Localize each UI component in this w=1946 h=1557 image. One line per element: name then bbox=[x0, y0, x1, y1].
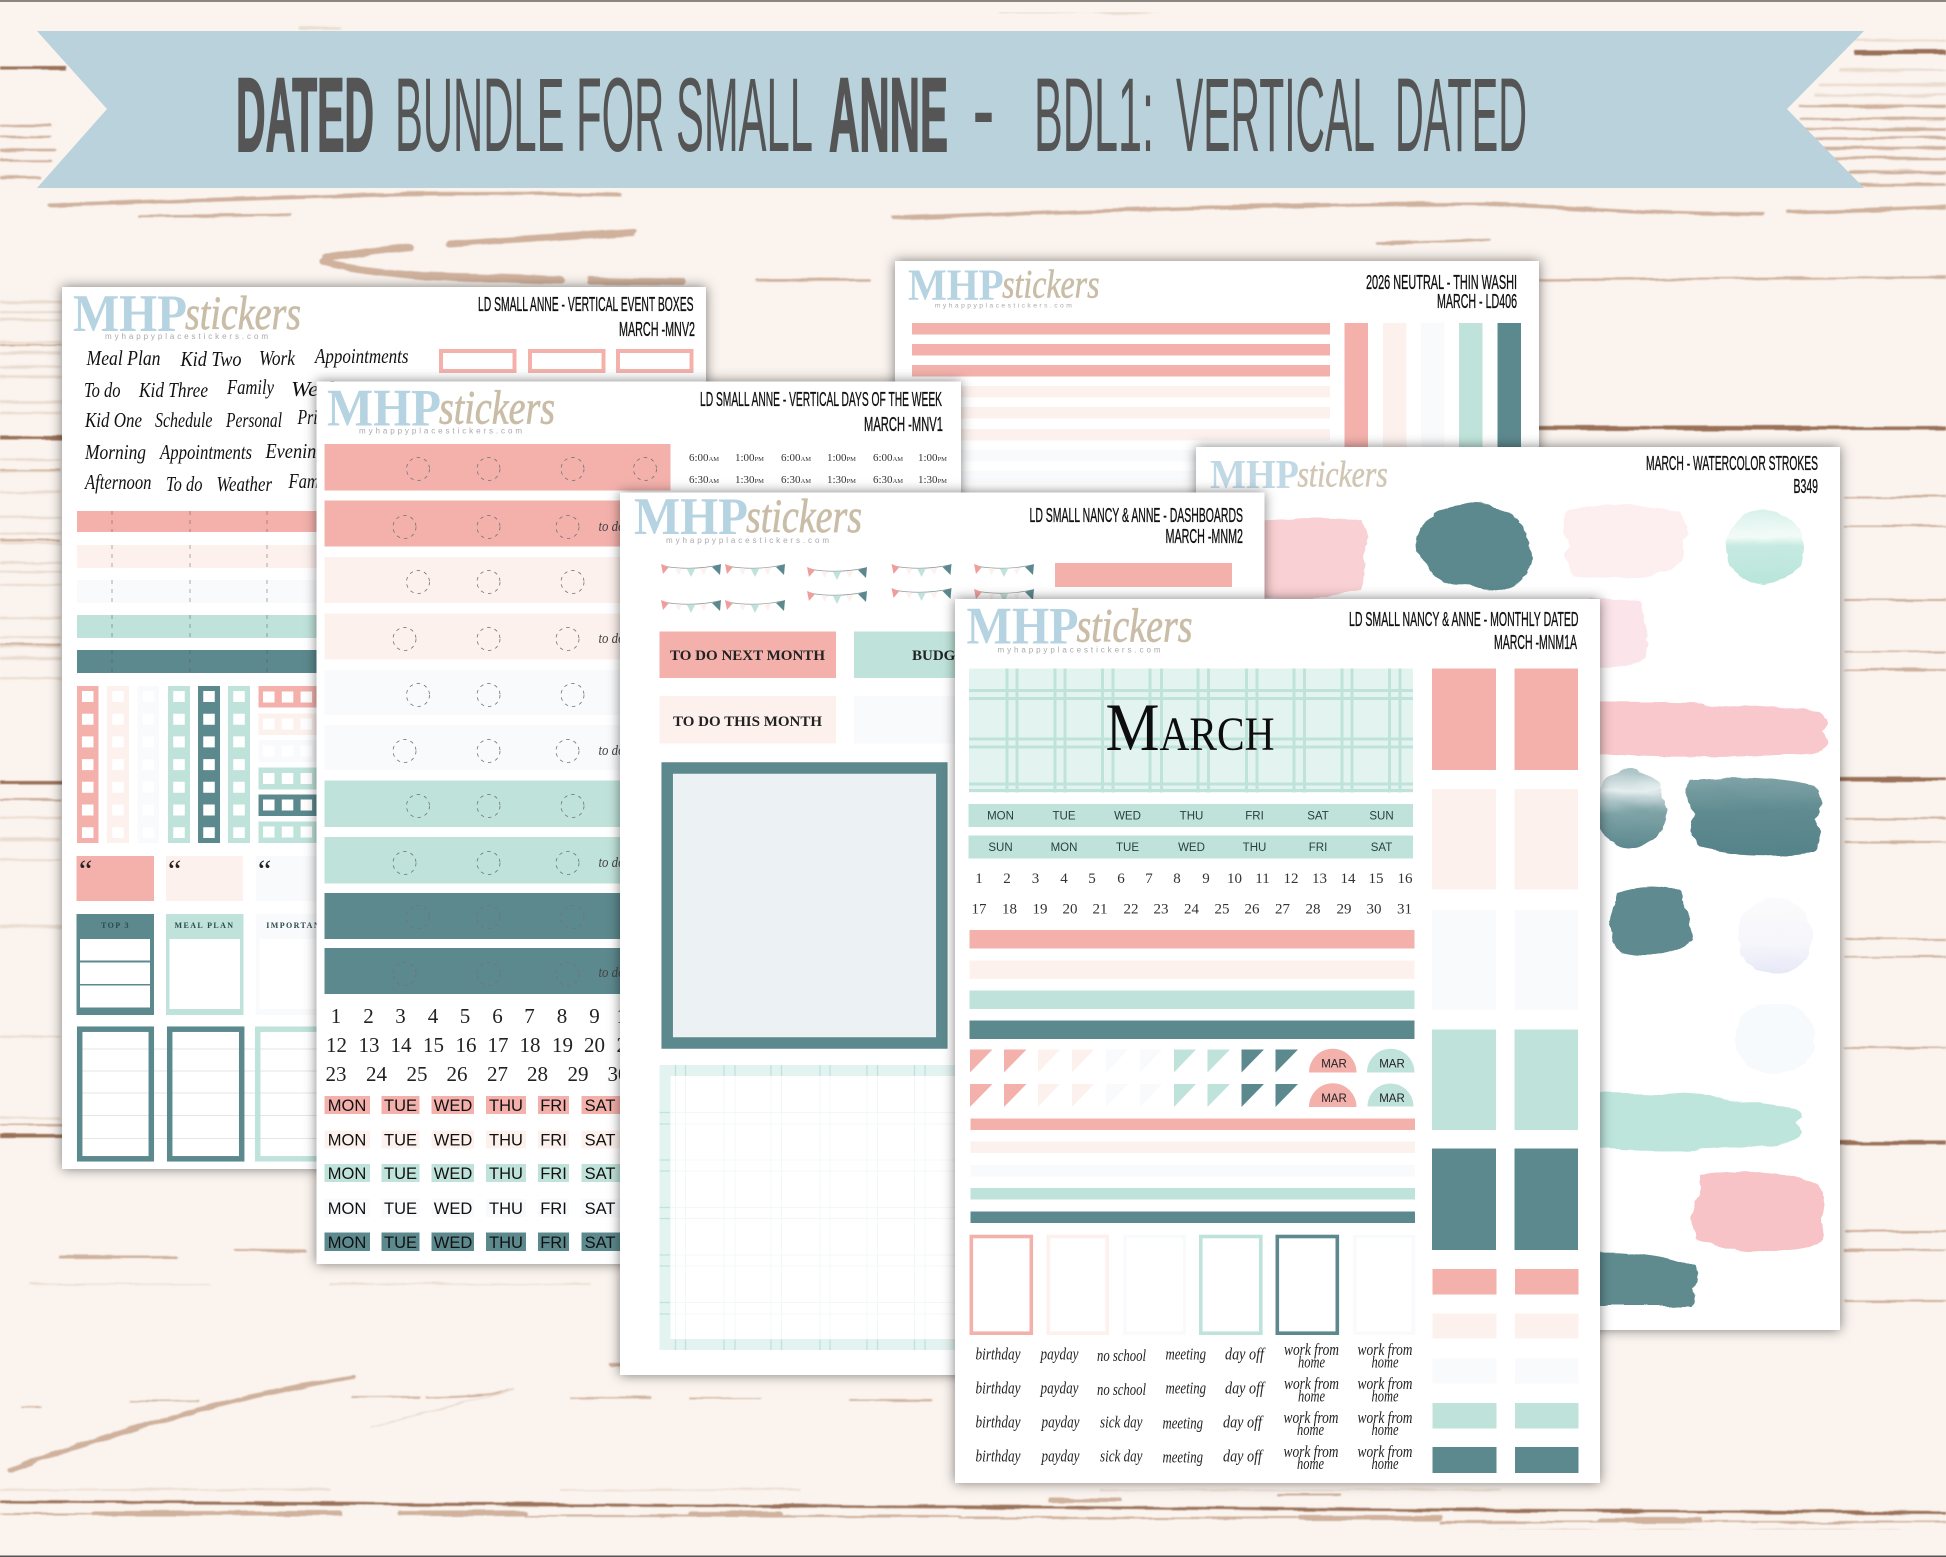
horizontal checklist tabs bbox=[258, 686, 334, 843]
logo: stickers bbox=[439, 382, 555, 434]
logo: stickers bbox=[746, 490, 862, 543]
lined note boxes bbox=[80, 1029, 330, 1159]
weekday stickers: THU bbox=[489, 1132, 523, 1150]
to do this month label bbox=[660, 696, 836, 744]
time stickers: 6:00AM bbox=[873, 452, 903, 464]
to do labels: to do bbox=[598, 965, 625, 981]
sheet heading bbox=[700, 389, 943, 436]
logo bbox=[908, 259, 1100, 310]
date number stickers: 18 bbox=[520, 1033, 540, 1057]
date numbers: 9 bbox=[1202, 871, 1210, 887]
logo: myhappyplacestickers.com bbox=[666, 536, 829, 545]
weekday stickers: SAT bbox=[585, 1234, 615, 1252]
date numbers: 29 bbox=[1336, 902, 1352, 918]
vertical checklist tabs bbox=[77, 686, 250, 843]
date number stickers: 19 bbox=[552, 1033, 573, 1057]
weekday bands: MON bbox=[987, 810, 1014, 822]
plaid month header: M bbox=[1106, 689, 1160, 765]
script word labels: To do bbox=[84, 378, 120, 402]
sheet heading: 2026 NEUTRAL - THIN WASHI bbox=[1366, 272, 1517, 294]
script event words: work from bbox=[1358, 1374, 1412, 1393]
weekday bands: MON bbox=[1051, 842, 1077, 854]
to do labels: to do bbox=[598, 743, 625, 759]
weekday stickers: SAT bbox=[585, 1132, 615, 1150]
weekday bands: FRI bbox=[1309, 842, 1327, 854]
logo: myhappyplacestickers.com bbox=[935, 303, 1072, 310]
weekday bands: FRI bbox=[1245, 810, 1264, 822]
sheet heading bbox=[1646, 453, 1818, 498]
date number stickers: 3 bbox=[395, 1004, 406, 1028]
logo: MHP bbox=[73, 285, 187, 343]
date numbers: 17 bbox=[972, 902, 987, 918]
pink outline boxes bbox=[441, 351, 692, 371]
script event words: home bbox=[1297, 1420, 1324, 1439]
date numbers: 5 bbox=[1088, 871, 1096, 887]
date number stickers: 23 bbox=[326, 1062, 346, 1086]
title banner: BDL1: bbox=[1034, 57, 1154, 174]
bunting stickers bbox=[661, 564, 1034, 613]
weekday stickers: TUE bbox=[384, 1200, 417, 1218]
time stickers: 6:30AM bbox=[689, 474, 719, 486]
script event words: birthday bbox=[976, 1378, 1021, 1398]
wide colour strips with dashed cuts bbox=[77, 511, 332, 673]
date number stickers: 1 bbox=[331, 1004, 341, 1028]
title banner: ANNE bbox=[829, 57, 948, 174]
time stickers: 6:00AM bbox=[781, 452, 811, 464]
logo bbox=[1210, 451, 1388, 497]
date number stickers: 25 bbox=[406, 1062, 428, 1086]
dashed circles bbox=[393, 458, 656, 986]
date number stickers: 9 bbox=[589, 1004, 600, 1028]
quote boxes: “ bbox=[168, 854, 181, 887]
script event words: work from bbox=[1284, 1374, 1339, 1393]
date numbers: 18 bbox=[1002, 902, 1017, 918]
script word labels: Schedule bbox=[155, 408, 212, 432]
script word labels: Priority bbox=[297, 405, 348, 429]
script event words: birthday bbox=[976, 1412, 1021, 1432]
script event words: home bbox=[1372, 1420, 1399, 1439]
pink label bar bbox=[1055, 563, 1232, 587]
date numbers: 10 bbox=[1227, 871, 1242, 887]
horizontal washi strips bbox=[912, 323, 1330, 482]
script event words: payday bbox=[1040, 1344, 1079, 1364]
time stickers: 1:00PM bbox=[918, 452, 947, 464]
title banner: DATED bbox=[1395, 57, 1527, 174]
date numbers: 12 bbox=[1284, 871, 1298, 887]
sheet heading: MARCH -MNM2 bbox=[1166, 526, 1243, 548]
date numbers: 1 bbox=[975, 871, 983, 887]
to do labels bbox=[598, 519, 625, 981]
script word labels: Appointments bbox=[158, 440, 252, 464]
script event words: meeting bbox=[1166, 1344, 1206, 1364]
weekday bands: SAT bbox=[1371, 842, 1392, 854]
weekday stickers: WED bbox=[434, 1200, 472, 1218]
sheet heading: MARCH -MNV1 bbox=[864, 414, 943, 436]
date numbers: 30 bbox=[1366, 902, 1382, 918]
triangle page flags bbox=[970, 1050, 1298, 1107]
quote boxes: “ bbox=[79, 854, 92, 887]
script event words: meeting bbox=[1166, 1378, 1206, 1398]
weekday stickers: MON bbox=[328, 1165, 366, 1183]
script event words: day off bbox=[1225, 1344, 1266, 1364]
headed note boxes: TOP 3 bbox=[101, 921, 130, 930]
date number stickers: 26 bbox=[446, 1062, 468, 1086]
script word labels: Evening bbox=[265, 439, 326, 463]
script event words: work from bbox=[1358, 1442, 1412, 1461]
script word labels: To do bbox=[166, 472, 202, 496]
headed note boxes bbox=[76, 914, 333, 1015]
logo: stickers bbox=[1297, 455, 1388, 496]
weekday stickers: THU bbox=[489, 1165, 523, 1183]
title banner bbox=[37, 31, 1864, 188]
weekday stickers: WED bbox=[434, 1165, 472, 1183]
date number stickers bbox=[326, 1004, 670, 1086]
sheet heading bbox=[1030, 505, 1243, 548]
weekday stickers: MON bbox=[328, 1097, 366, 1115]
script event words: work from bbox=[1284, 1442, 1338, 1461]
script word labels: Week bbox=[291, 377, 340, 401]
to do this month label: TO DO THIS MONTH bbox=[673, 714, 822, 730]
weekday stickers: THU bbox=[489, 1200, 523, 1218]
weekday stickers: FRI bbox=[540, 1234, 567, 1252]
panel: vertical days of the week sheet MNV1 bbox=[316, 380, 961, 1264]
weekday bands: TUE bbox=[1052, 810, 1076, 822]
headed note boxes: MEAL PLAN bbox=[175, 921, 234, 930]
date number stickers: 8 bbox=[557, 1004, 567, 1028]
logo bbox=[327, 380, 555, 438]
date numbers: 14 bbox=[1340, 871, 1356, 887]
date numbers: 26 bbox=[1244, 902, 1260, 918]
date number stickers: 24 bbox=[366, 1062, 388, 1086]
date numbers: 28 bbox=[1306, 902, 1320, 918]
weekday stickers: TUE bbox=[384, 1132, 417, 1150]
date numbers: 8 bbox=[1173, 871, 1181, 887]
script event words bbox=[976, 1340, 1412, 1473]
script event words: day off bbox=[1225, 1378, 1266, 1398]
script event words: birthday bbox=[976, 1446, 1021, 1466]
watercolor swatches bbox=[1262, 502, 1828, 1306]
script event words: work from bbox=[1358, 1408, 1412, 1427]
to do labels: to do bbox=[598, 855, 625, 871]
date number stickers: 29 bbox=[568, 1062, 588, 1086]
script event words: birthday bbox=[976, 1344, 1021, 1364]
date numbers: 15 bbox=[1368, 871, 1384, 887]
script event words: home bbox=[1298, 1352, 1325, 1372]
quote boxes bbox=[76, 854, 333, 901]
script word labels: Kid Three bbox=[138, 378, 208, 402]
blank pale label bbox=[854, 696, 1031, 744]
sheet heading: MARCH -MNM1A bbox=[1494, 632, 1577, 654]
logo: MHP bbox=[966, 598, 1078, 656]
script event words: home bbox=[1372, 1386, 1399, 1406]
time stickers: 1:30PM bbox=[918, 474, 947, 486]
date numbers: 16 bbox=[1398, 871, 1413, 887]
date number stickers: 7 bbox=[524, 1004, 535, 1028]
sheet heading bbox=[478, 294, 695, 341]
script event words: work from bbox=[1358, 1340, 1412, 1359]
sheet heading: MARCH - LD406 bbox=[1437, 291, 1517, 313]
sheet heading: B349 bbox=[1794, 476, 1818, 498]
sheet heading: LD SMALL NANCY & ANNE - MONTHLY DATED bbox=[1349, 609, 1578, 631]
wide stripes bbox=[970, 930, 1414, 1039]
sheet heading: LD SMALL ANNE - VERTICAL DAYS OF THE WEEK bbox=[700, 389, 942, 411]
panel: watercolor strokes sheet B349 bbox=[1196, 447, 1840, 1330]
script word labels: Kid One bbox=[84, 408, 142, 432]
weekday stickers: THU bbox=[489, 1234, 523, 1252]
grid panel with mint frame bbox=[660, 1065, 995, 1350]
sheet heading bbox=[1349, 609, 1578, 654]
script word labels: Weather bbox=[216, 472, 273, 496]
sheet heading bbox=[1366, 272, 1517, 313]
date numbers: 7 bbox=[1145, 871, 1153, 887]
title banner: DATED bbox=[236, 57, 374, 174]
logo: myhappyplacestickers.com bbox=[359, 426, 522, 436]
date number stickers: 12 bbox=[326, 1033, 347, 1057]
weekday bands: SUN bbox=[1369, 810, 1394, 822]
logo: stickers bbox=[185, 287, 301, 340]
logo: myhappyplacestickers.com bbox=[105, 332, 268, 341]
panel: vertical event boxes sheet MNV2 bbox=[62, 285, 706, 1169]
script event words: no school bbox=[1097, 1346, 1146, 1365]
date number stickers: 28 bbox=[527, 1062, 548, 1086]
script word labels: Personal bbox=[225, 408, 282, 432]
logo: myhappyplacestickers.com bbox=[998, 646, 1161, 654]
title banner: BUNDLE FOR SMALL bbox=[395, 57, 813, 174]
month half-circle tabs: MAR bbox=[1321, 1058, 1347, 1070]
date number stickers: 17 bbox=[488, 1033, 508, 1057]
panel: thin washi sheet LD406 bbox=[895, 259, 1539, 601]
date numbers: 11 bbox=[1255, 871, 1270, 887]
date number stickers: 20 bbox=[584, 1033, 605, 1057]
script word labels bbox=[83, 344, 409, 496]
script word labels: Appointments bbox=[313, 344, 408, 368]
right column colour blocks bbox=[1432, 668, 1578, 1473]
script word labels: Kid Two bbox=[180, 347, 242, 371]
weekday bands: TUE bbox=[1116, 842, 1139, 854]
date number stickers: 30 bbox=[608, 1062, 628, 1086]
month half-circle tabs: MAR bbox=[1321, 1093, 1347, 1105]
weekday stickers: TUE bbox=[384, 1097, 417, 1115]
date numbers: 6 bbox=[1117, 871, 1125, 887]
weekday stickers: WED bbox=[434, 1097, 472, 1115]
date number stickers: 11 bbox=[650, 1004, 670, 1028]
date numbers: 20 bbox=[1062, 902, 1078, 918]
date number stickers: 27 bbox=[487, 1062, 508, 1086]
logo bbox=[966, 598, 1192, 656]
script word labels: Morning bbox=[84, 440, 146, 464]
script event words: work from bbox=[1284, 1408, 1338, 1427]
weekday stickers bbox=[324, 1096, 620, 1252]
script event words: sick day bbox=[1100, 1412, 1143, 1432]
script word labels: Family bbox=[226, 375, 275, 399]
logo: stickers bbox=[1076, 600, 1192, 652]
budget label: BUDGET bbox=[912, 648, 975, 664]
to do labels: to do bbox=[598, 519, 625, 535]
script event words: day off bbox=[1223, 1412, 1264, 1432]
panel: dashboards sheet MNM2 bbox=[620, 488, 1264, 1375]
weekday bands: SUN bbox=[988, 842, 1013, 854]
weekday stickers: SAT bbox=[585, 1097, 615, 1115]
quote boxes: “ bbox=[258, 854, 271, 887]
weekday stickers: TUE bbox=[384, 1234, 417, 1252]
script event words: home bbox=[1372, 1352, 1399, 1372]
script event words: payday bbox=[1040, 1378, 1079, 1398]
date numbers: 2 bbox=[1003, 871, 1011, 887]
weekday stickers: MON bbox=[328, 1200, 366, 1218]
date numbers: 3 bbox=[1032, 871, 1039, 887]
date number stickers: 10 bbox=[616, 1004, 638, 1028]
outline boxes bbox=[971, 1236, 1413, 1333]
weekday bands: WED bbox=[1178, 842, 1205, 854]
script word labels: Meal Plan bbox=[86, 346, 160, 370]
date number stickers: 2 bbox=[363, 1004, 374, 1028]
title banner: - bbox=[974, 79, 993, 146]
weekday bands: WED bbox=[1114, 810, 1141, 822]
month half-circle tabs: MAR bbox=[1379, 1093, 1405, 1105]
title banner: VERTICAL bbox=[1176, 57, 1375, 174]
weekday bands: SAT bbox=[1307, 810, 1329, 822]
script event words: home bbox=[1297, 1454, 1324, 1473]
plaid month header bbox=[969, 668, 1413, 792]
panel: monthly dated sheet MNM1A bbox=[955, 598, 1600, 1483]
date number stickers: 5 bbox=[460, 1004, 470, 1028]
logo: MHP bbox=[908, 259, 1004, 309]
sheet heading: MARCH -MNV2 bbox=[619, 319, 695, 341]
weekday stickers: MON bbox=[328, 1132, 366, 1150]
script event words: day off bbox=[1223, 1446, 1264, 1466]
time stickers: 1:00PM bbox=[827, 452, 856, 464]
time stickers: 6:00AM bbox=[689, 452, 719, 464]
date numbers: 13 bbox=[1312, 871, 1327, 887]
weekday stickers: THU bbox=[489, 1097, 523, 1115]
weekday bands bbox=[968, 804, 1413, 858]
budget label bbox=[854, 632, 1031, 678]
script word labels: Family bbox=[288, 469, 336, 493]
logo bbox=[73, 285, 301, 343]
weekday stickers: FRI bbox=[540, 1132, 567, 1150]
to do labels: to do bbox=[598, 631, 625, 647]
date numbers: 23 bbox=[1154, 902, 1168, 918]
script event words: meeting bbox=[1162, 1448, 1203, 1466]
to do next month label bbox=[660, 632, 836, 678]
time stickers bbox=[689, 452, 947, 486]
thin stripes bbox=[970, 1118, 1415, 1223]
sheet heading: LD SMALL NANCY & ANNE - DASHBOARDS bbox=[1030, 505, 1243, 527]
weekday stickers: TUE bbox=[384, 1165, 417, 1183]
logo: MHP bbox=[327, 380, 441, 438]
plaid month header: ARCH bbox=[1160, 708, 1274, 761]
coloured day bars bbox=[324, 444, 670, 994]
script event words: home bbox=[1372, 1454, 1399, 1473]
date numbers: 21 bbox=[1092, 902, 1108, 918]
date number stickers: 6 bbox=[492, 1004, 503, 1028]
weekday stickers: FRI bbox=[540, 1165, 567, 1183]
time stickers: 1:30PM bbox=[735, 474, 764, 486]
headed note boxes: IMPORTANT bbox=[266, 921, 328, 930]
date numbers: 19 bbox=[1032, 902, 1048, 918]
date number stickers: 22 bbox=[650, 1033, 670, 1057]
date numbers: 22 bbox=[1124, 902, 1138, 918]
script word labels: Afternoon bbox=[83, 470, 152, 494]
logo bbox=[634, 488, 862, 546]
script word labels: Work bbox=[259, 346, 296, 370]
script event words: meeting bbox=[1162, 1414, 1203, 1432]
date number stickers: 4 bbox=[428, 1004, 439, 1028]
script event words: no school bbox=[1097, 1380, 1146, 1399]
weekday stickers: MON bbox=[328, 1234, 366, 1252]
logo: MHP bbox=[1210, 451, 1299, 497]
time stickers: 1:00PM bbox=[735, 452, 764, 464]
date number stickers: 16 bbox=[456, 1033, 476, 1057]
date number stickers: 13 bbox=[358, 1033, 380, 1057]
logo: stickers bbox=[1002, 262, 1100, 307]
to do next month label: TO DO NEXT MONTH bbox=[670, 648, 825, 664]
time stickers: 1:30PM bbox=[827, 474, 856, 486]
weekday stickers: WED bbox=[434, 1132, 472, 1150]
script event words: work from bbox=[1284, 1340, 1339, 1359]
date numbers: 24 bbox=[1184, 902, 1200, 918]
date number stickers: 15 bbox=[423, 1033, 444, 1057]
month half-circle tabs bbox=[1309, 1049, 1414, 1107]
weekday stickers: SAT bbox=[585, 1200, 615, 1218]
time stickers: 6:30AM bbox=[873, 474, 903, 486]
weekday bands: THU bbox=[1180, 810, 1203, 822]
date numbers: 27 bbox=[1275, 902, 1290, 918]
month half-circle tabs: MAR bbox=[1379, 1058, 1405, 1070]
weekday stickers: SAT bbox=[585, 1165, 615, 1183]
weekday stickers: FRI bbox=[540, 1200, 567, 1218]
date number stickers: 21 bbox=[616, 1033, 638, 1057]
large teal framed box bbox=[667, 768, 942, 1043]
script event words: payday bbox=[1041, 1412, 1080, 1432]
weekday stickers: FRI bbox=[540, 1097, 567, 1115]
date numbers bbox=[972, 871, 1413, 918]
sheet heading: LD SMALL ANNE - VERTICAL EVENT BOXES bbox=[478, 294, 694, 316]
date numbers: 25 bbox=[1214, 902, 1230, 918]
time stickers: 6:30AM bbox=[781, 474, 811, 486]
date numbers: 31 bbox=[1397, 902, 1412, 918]
script event words: sick day bbox=[1100, 1446, 1143, 1466]
script event words: home bbox=[1298, 1386, 1325, 1406]
logo: MHP bbox=[634, 488, 748, 546]
script event words: payday bbox=[1041, 1446, 1080, 1466]
weekday stickers: WED bbox=[434, 1234, 472, 1252]
weekday bands: THU bbox=[1243, 842, 1266, 854]
vertical washi strips bbox=[1344, 323, 1521, 593]
date number stickers: 14 bbox=[390, 1033, 412, 1057]
date numbers: 4 bbox=[1060, 871, 1068, 887]
